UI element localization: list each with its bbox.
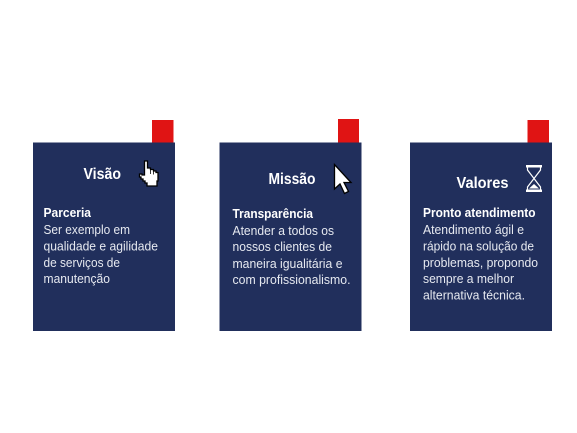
heading: Missão: Missão <box>268 171 316 188</box>
card background: Visão <box>33 142 175 331</box>
text block: Visão: Ser exemplo em <box>44 222 130 237</box>
panel: Missão <box>220 119 362 331</box>
subheading: Pronto atendimento: Pronto atendimento <box>423 205 536 220</box>
icon: hand pointer <box>140 161 158 186</box>
text block: Missão <box>232 223 350 287</box>
red tab: Valores <box>528 120 549 143</box>
red tab: Missão <box>338 119 359 143</box>
panel: Valores <box>410 120 552 331</box>
text block: Visão: qualidade e agilidade <box>44 238 158 254</box>
heading: Valores: Valores <box>456 175 508 192</box>
text block: Visão: manutenção <box>44 271 110 286</box>
text block: Missão: Atender a todos os <box>232 223 334 238</box>
text block: Valores: rápido na solução de <box>423 238 534 254</box>
heading: Visão: Visão <box>84 166 121 183</box>
text block: Missão: maneira igualitária e <box>232 256 342 271</box>
text block: Valores: Atendimento ágil e <box>423 222 524 237</box>
subheading: Parceria: Parceria <box>44 205 92 220</box>
card background: Missão <box>220 142 362 331</box>
icon: arrow cursor <box>334 164 351 194</box>
text block: Valores: alternativa técnica. <box>423 288 525 302</box>
text block: Visão: de serviços de <box>44 255 120 270</box>
text block: Missão: com profissionalismo. <box>232 272 350 287</box>
text block: Valores: sempre a melhor <box>423 271 515 286</box>
panel: Visão <box>33 120 175 331</box>
red tab: Visão <box>152 120 174 143</box>
icon: hourglass <box>526 165 542 192</box>
text block: Valores <box>423 222 538 302</box>
text block: Valores: problemas, propondo <box>423 255 538 270</box>
card background: Valores <box>410 142 552 331</box>
text block: Missão: nossos clientes de <box>232 239 332 254</box>
text block: Visão <box>44 222 158 286</box>
subheading: Transparência: Transparência <box>232 206 314 221</box>
